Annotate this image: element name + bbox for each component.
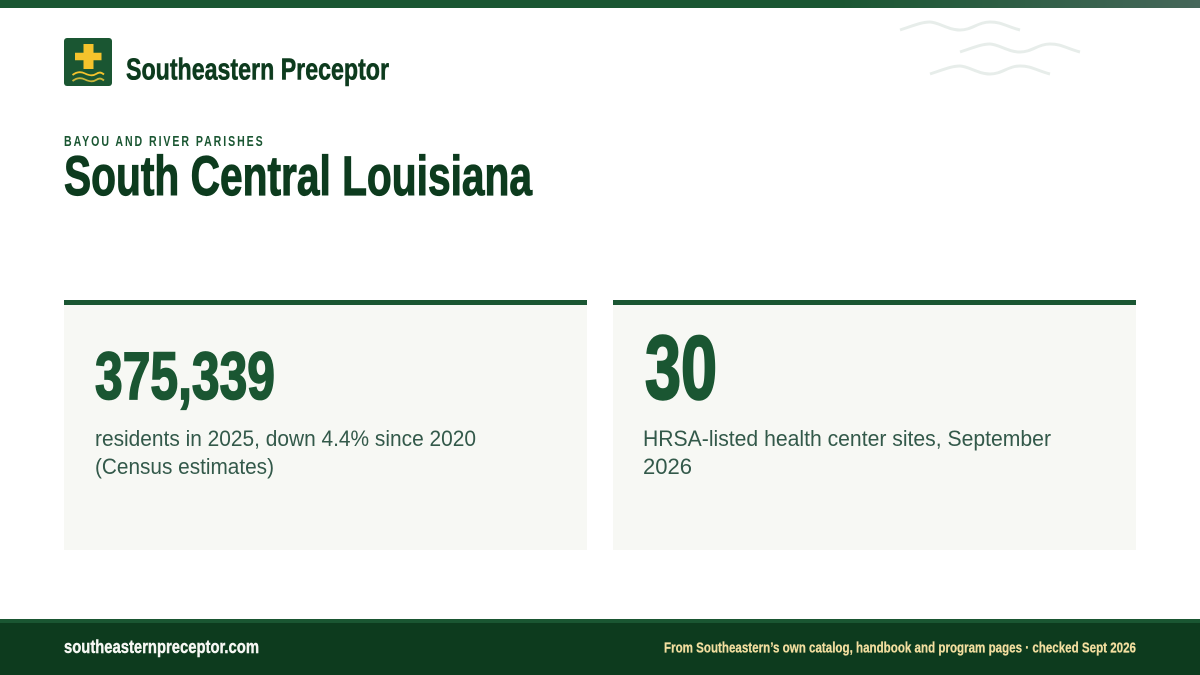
description: residents: residents in 2025, down 4.4% since 2020 [95,426,476,451]
eyebrow: BAYOU AND RIVER PARISHES [64,132,263,149]
description: residents [95,426,476,479]
logo icon [64,38,112,86]
description: sites: 2026 [643,454,692,479]
footer url: southeasternpreceptor.com [64,637,259,657]
brand name: Southeastern Preceptor [126,52,389,86]
footer band [0,619,1200,675]
big number: sites: 30 [645,318,717,418]
panel: residents stat [64,300,587,550]
description: residents: (Census estimates) [95,454,274,479]
description: sites [643,426,1051,479]
title: South Central Louisiana [64,144,533,207]
description: sites: HRSA-listed health center sites, September [643,426,1051,451]
big number: residents: 375,339 [95,339,275,414]
panel: health center sites stat [613,300,1136,550]
top accent bar [0,0,1200,8]
decorative waves [900,22,1080,74]
